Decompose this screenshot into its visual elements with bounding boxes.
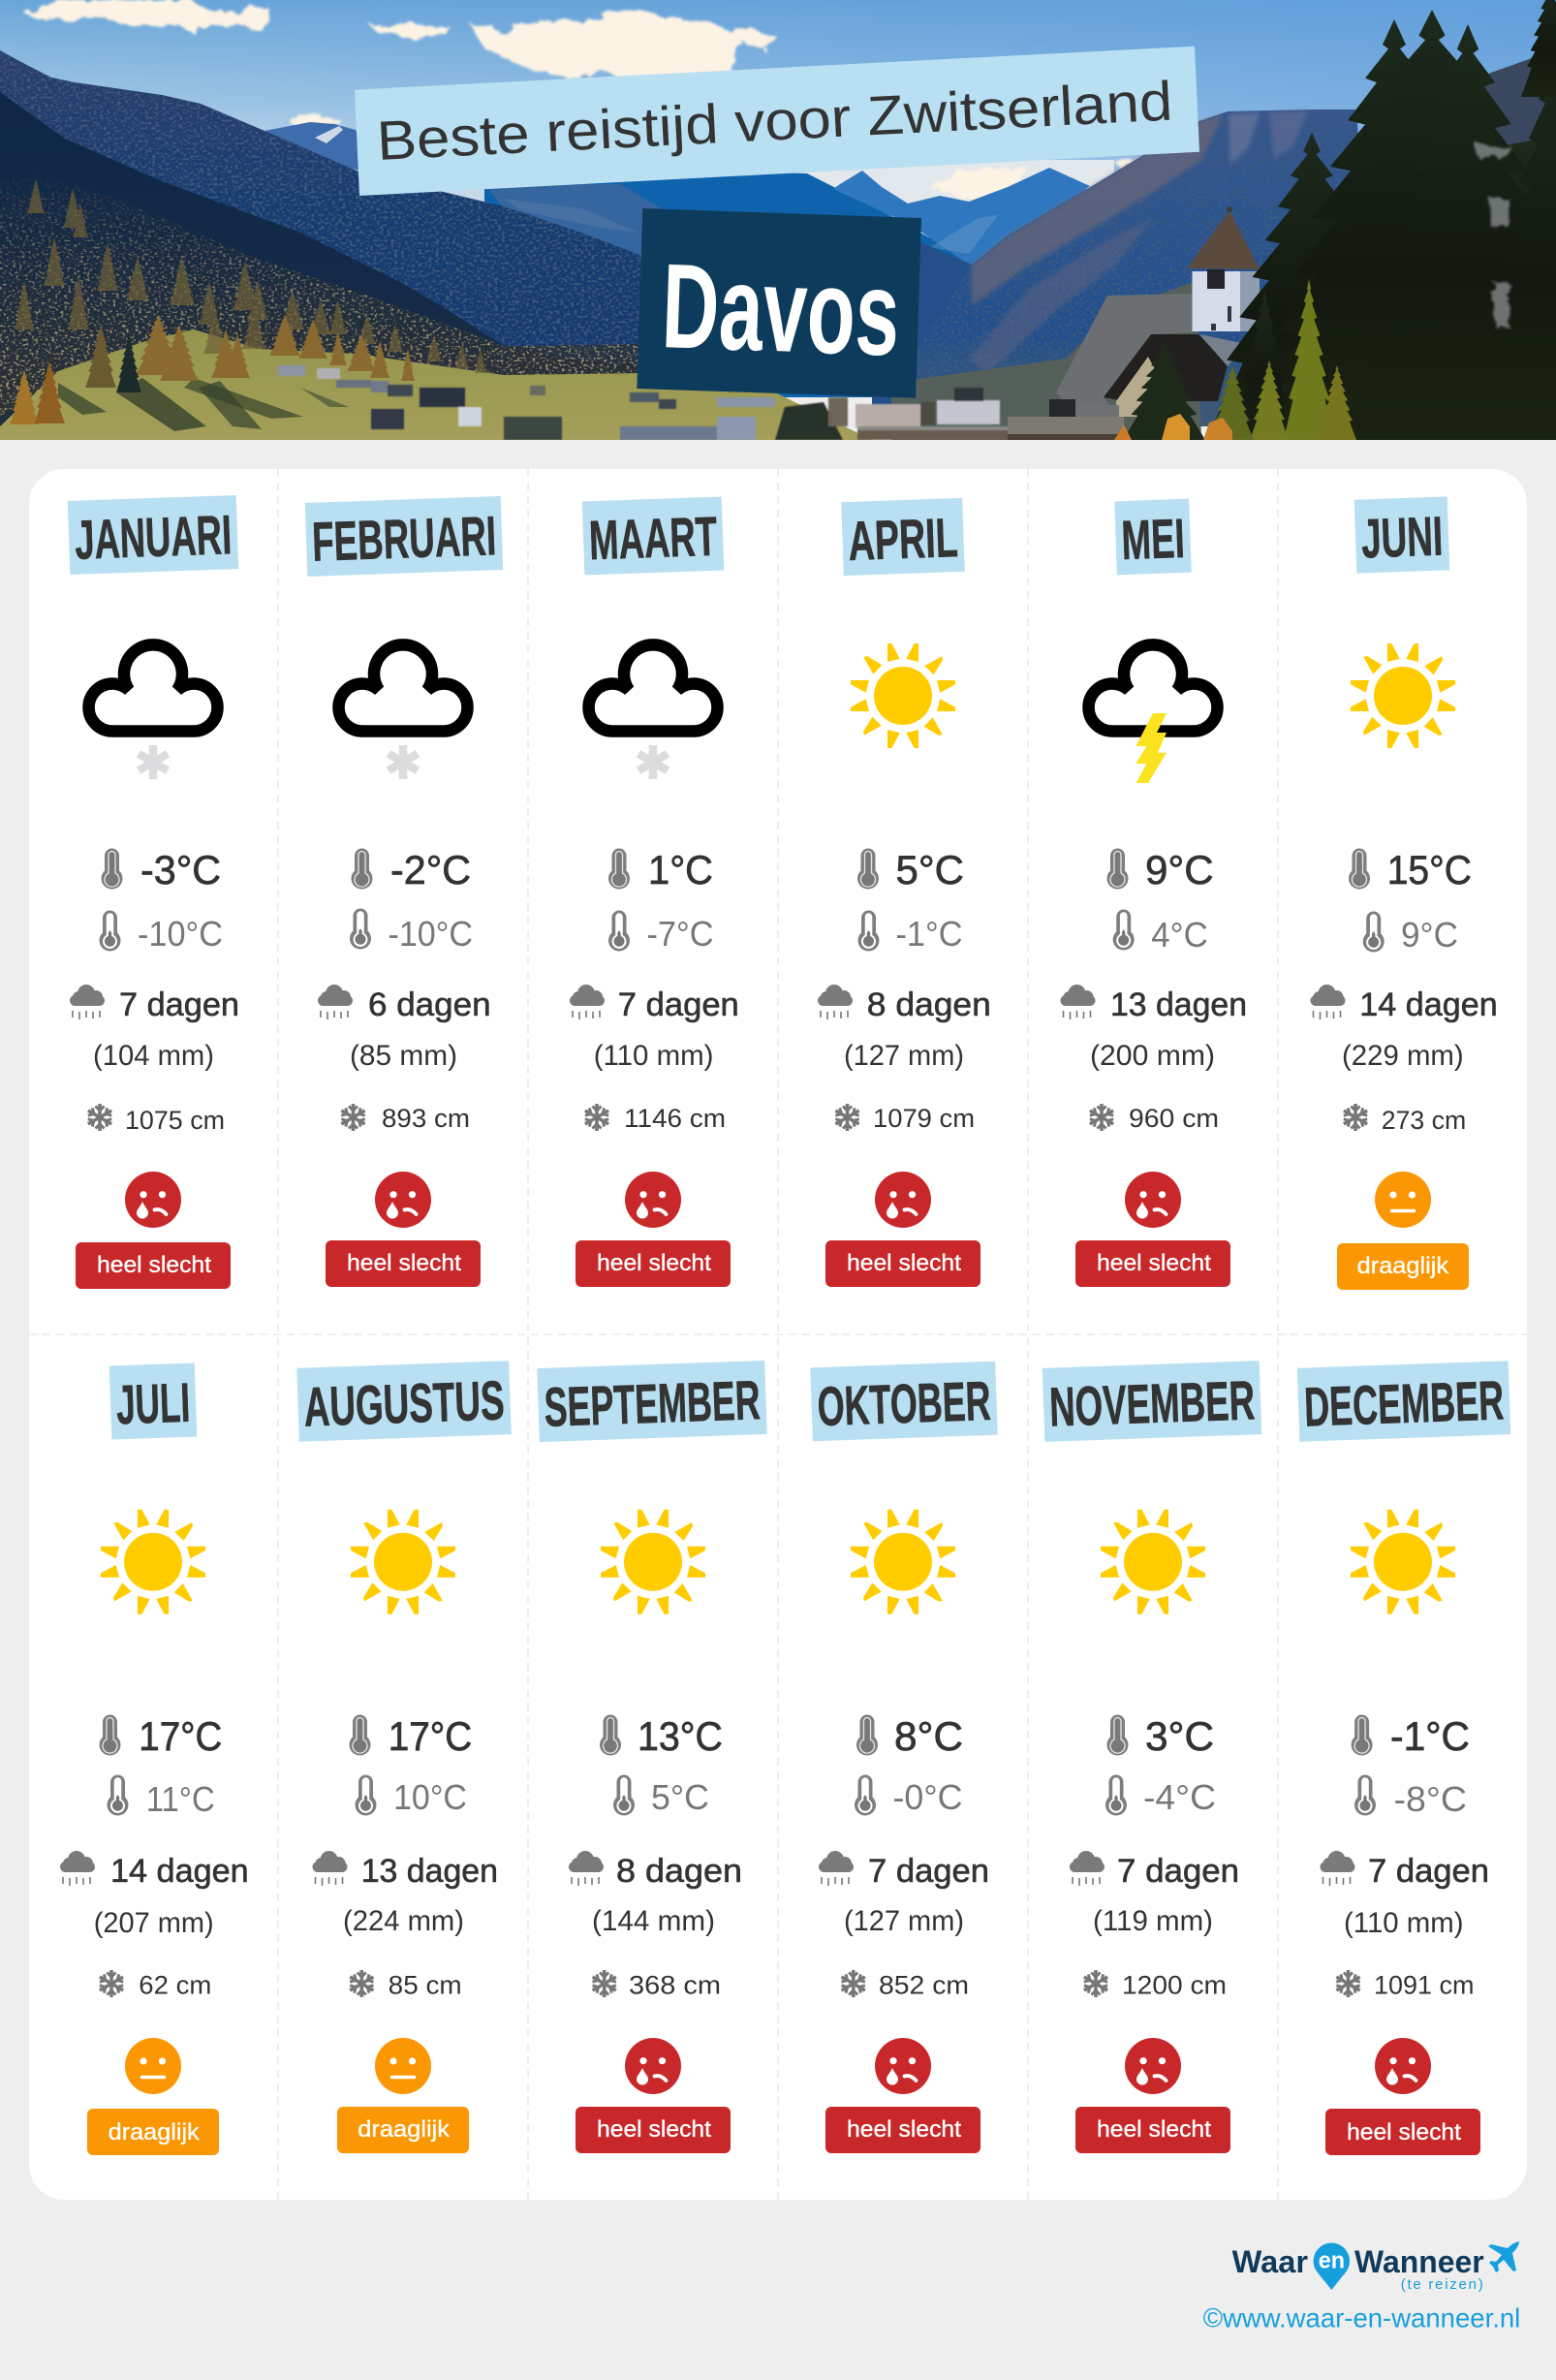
month: mei <box>1060 499 1247 1287</box>
max temperature: 15°C <box>1387 847 1472 892</box>
min temperature <box>350 909 473 954</box>
rain days <box>60 1851 249 1890</box>
rainfall: (207 mm) <box>94 1907 214 1939</box>
rating <box>326 1172 481 1287</box>
heading februari <box>305 496 503 577</box>
rain days <box>312 1851 498 1890</box>
icon: thunderstorm cloud <box>1089 644 1217 783</box>
far right slope behind trees <box>1484 58 1545 145</box>
snowfall: 1146 cm <box>624 1104 726 1133</box>
snowfall: 85 cm <box>389 1971 462 2000</box>
month: oktober <box>810 1362 998 2153</box>
central blue mountains <box>484 165 969 397</box>
rain days: 7 dagen <box>1368 1853 1489 1890</box>
max temperature <box>1349 847 1472 892</box>
rain days: 13 dagen <box>361 1853 498 1890</box>
snowfall: 62 cm <box>139 1971 211 2000</box>
heading mei: MEI <box>1121 508 1186 572</box>
larches inside the forest <box>15 179 486 373</box>
heading oktober <box>810 1362 998 1441</box>
heading april: APRIL <box>848 507 959 573</box>
rain days: 8 dagen <box>867 986 991 1023</box>
rain days: 7 dagen <box>868 1853 989 1890</box>
min temperature <box>858 911 963 954</box>
title banner: Beste reistijd voor Zwitserland <box>375 70 1174 172</box>
heading november: NOVEMBER <box>1048 1369 1256 1439</box>
rating <box>87 2038 219 2155</box>
heading april <box>841 498 965 576</box>
heading augustus <box>296 1361 512 1442</box>
larch forest texture <box>0 165 669 417</box>
heading juni: JUNI <box>1360 506 1444 570</box>
rating <box>76 1172 231 1289</box>
month: januari <box>68 495 239 1289</box>
rating: heel slecht <box>1097 2116 1211 2143</box>
snowfall <box>1088 1104 1219 1133</box>
max temperature <box>349 1713 472 1759</box>
building glimpses between trees <box>1477 145 1509 328</box>
min temperature <box>355 1775 467 1817</box>
rainfall: (224 mm) <box>343 1905 464 1937</box>
rain days: 7 dagen <box>618 986 739 1023</box>
rain days: 6 dagen <box>368 986 491 1023</box>
title banner <box>355 47 1199 196</box>
icon: snow cloud <box>589 644 717 779</box>
snowfall <box>339 1104 470 1133</box>
min temperature: -10°C <box>138 914 223 954</box>
rainfall: (229 mm) <box>1342 1040 1464 1072</box>
snowfall: 368 cm <box>629 1971 721 2000</box>
yellow larches and autumn bushes <box>1114 279 1356 440</box>
icon: snow cloud <box>89 644 217 779</box>
mid ridge right of centre <box>872 242 972 405</box>
min temperature <box>1113 909 1208 955</box>
min temperature: -10°C <box>388 914 473 954</box>
max temperature: 8°C <box>894 1713 963 1759</box>
max temperature: -3°C <box>140 847 221 892</box>
min temperature <box>608 911 713 954</box>
icon: snow cloud <box>339 644 467 779</box>
heading november <box>1043 1361 1261 1442</box>
month: november <box>1043 1361 1261 2153</box>
heading januari <box>68 495 238 575</box>
max temperature <box>856 1713 963 1759</box>
rating: heel slecht <box>1347 2119 1461 2145</box>
max temperature: 17°C <box>389 1713 472 1759</box>
snowfall: 1200 cm <box>1122 1971 1227 2000</box>
rain days <box>569 1851 742 1890</box>
rating <box>825 2038 980 2153</box>
golden larches on the slope <box>10 315 415 424</box>
dark spruce trees <box>1205 0 1556 440</box>
max temperature: -1°C <box>1390 1713 1470 1759</box>
rating: draaglijk <box>109 2119 201 2145</box>
min temperature: -8°C <box>1393 1779 1467 1819</box>
rainfall: (110 mm) <box>1344 1907 1463 1939</box>
rating: draaglijk <box>358 2116 451 2143</box>
min temperature: 11°C <box>146 1779 215 1819</box>
rain days <box>819 1851 989 1890</box>
rain days <box>1060 985 1247 1023</box>
min temperature <box>99 911 223 954</box>
rating: heel slecht <box>1097 1250 1211 1276</box>
max temperature <box>608 847 713 892</box>
location badge: Davos: Davos <box>660 239 902 382</box>
heading januari: JANUARI <box>74 504 233 572</box>
month: februari <box>305 496 503 1287</box>
distant left peak <box>265 122 358 171</box>
max temperature <box>1352 1713 1470 1759</box>
month: augustus <box>296 1361 512 2153</box>
heading augustus: AUGUSTUS <box>303 1369 506 1439</box>
icon: sun <box>851 1510 955 1614</box>
min temperature <box>1354 1775 1467 1819</box>
min temperature: 10°C <box>393 1777 467 1817</box>
copyright url: ©www.waar-en-wanneer.nl <box>1203 2303 1520 2333</box>
rain days <box>1320 1851 1489 1890</box>
snowfall: 1091 cm <box>1374 1971 1475 2000</box>
heading september: SEPTEMBER <box>544 1369 762 1439</box>
rating: heel slecht <box>597 1250 711 1276</box>
month: juli <box>60 1362 249 2155</box>
rain days <box>1070 1851 1239 1890</box>
meadow <box>0 329 872 440</box>
rating <box>576 2038 731 2153</box>
snowfall: 273 cm <box>1382 1106 1466 1135</box>
max temperature: 3°C <box>1145 1713 1214 1759</box>
rainfall: (110 mm) <box>594 1040 713 1072</box>
icon: sun <box>1351 1510 1455 1614</box>
icon: sun <box>351 1510 455 1614</box>
panel: monthly climate card <box>29 469 1527 2200</box>
snowfall: 893 cm <box>382 1104 470 1133</box>
rain days: 14 dagen <box>1359 986 1498 1023</box>
logo: Waar en Wanneer: Wanneer <box>1354 2244 1484 2279</box>
left back ridge <box>0 50 641 364</box>
rainfall: (104 mm) <box>93 1040 214 1072</box>
far jagged peaks <box>833 168 1090 266</box>
rainfall: (127 mm) <box>844 1905 964 1937</box>
max temperature: 17°C <box>139 1713 222 1759</box>
snowfall: 1079 cm <box>873 1104 975 1133</box>
snowfall <box>1342 1104 1466 1135</box>
month: december <box>1297 1361 1510 2155</box>
rating <box>1075 2038 1230 2153</box>
rating <box>1075 1172 1230 1287</box>
snowfall: 960 cm <box>1129 1104 1219 1133</box>
min temperature <box>107 1775 215 1819</box>
snowfall: 852 cm <box>879 1971 969 2000</box>
rating <box>825 1172 980 1287</box>
snowfall <box>86 1104 225 1135</box>
rating: heel slecht <box>97 1252 211 1278</box>
rainfall: (127 mm) <box>844 1040 964 1072</box>
heading september <box>537 1361 767 1442</box>
logo: Waar en Wanneer: (te reizen) <box>1401 2276 1483 2293</box>
max temperature: -2°C <box>390 847 471 892</box>
rating: heel slecht <box>847 1250 961 1276</box>
rain days: 7 dagen <box>1117 1853 1239 1890</box>
max temperature <box>101 847 221 892</box>
rain days <box>818 985 991 1023</box>
heading juli: JULI <box>115 1372 191 1436</box>
snowfall <box>839 1970 969 2000</box>
rain days: 7 dagen <box>119 986 239 1023</box>
rating: heel slecht <box>597 2116 711 2143</box>
left front ridge <box>0 92 669 436</box>
min temperature: -7°C <box>647 914 713 954</box>
month: maart <box>570 497 739 1287</box>
logo: Waar en Wanneer <box>1232 2241 1519 2293</box>
min temperature: -1°C <box>895 914 963 954</box>
icon: sun <box>1351 643 1455 748</box>
min temperature <box>1105 1775 1216 1817</box>
right mountain <box>918 110 1376 426</box>
icon: sun <box>1101 1510 1205 1614</box>
min temperature: 4°C <box>1151 915 1208 955</box>
rainfall: (200 mm) <box>1090 1040 1215 1072</box>
max temperature: 5°C <box>895 847 964 892</box>
icon: sun <box>101 1510 205 1614</box>
max temperature <box>857 847 964 892</box>
min temperature <box>613 1775 709 1817</box>
rain days <box>70 985 239 1023</box>
snowfall <box>1082 1970 1227 2000</box>
rain days <box>570 985 739 1023</box>
rating <box>337 2038 469 2153</box>
max temperature: 9°C <box>1145 847 1214 892</box>
rain days: 14 dagen <box>110 1853 249 1890</box>
rainfall: (119 mm) <box>1093 1905 1213 1937</box>
min temperature: 5°C <box>651 1777 709 1817</box>
icon: map pin: en <box>1319 2248 1345 2274</box>
church <box>1008 206 1260 440</box>
max temperature <box>351 847 471 892</box>
max temperature <box>1106 1713 1214 1759</box>
month: september <box>537 1361 767 2153</box>
max temperature <box>1106 847 1214 892</box>
rating: heel slecht <box>347 1250 461 1276</box>
heading mei <box>1114 499 1192 575</box>
month: juni <box>1310 496 1498 1290</box>
snowfall <box>348 1970 462 2000</box>
icon: sun <box>851 643 955 748</box>
max temperature: 1°C <box>648 847 713 892</box>
max temperature: 13°C <box>638 1713 723 1759</box>
rainfall: (85 mm) <box>350 1040 457 1072</box>
min temperature <box>1363 911 1458 955</box>
rating <box>1337 1172 1469 1290</box>
rating: draaglijk <box>1357 1253 1449 1279</box>
min temperature <box>855 1775 963 1817</box>
rating: heel slecht <box>847 2116 961 2143</box>
min temperature: 9°C <box>1401 915 1458 955</box>
rain days: 13 dagen <box>1110 986 1247 1023</box>
snowfall <box>590 1970 721 2000</box>
heading februari: FEBRUARI <box>311 505 497 574</box>
heading juni <box>1354 496 1449 574</box>
rating <box>1325 2038 1480 2155</box>
logo: Waar en Wanneer: Waar <box>1232 2244 1308 2279</box>
rain days: 8 dagen <box>616 1853 742 1890</box>
rain days <box>318 985 491 1023</box>
hero: alpine valley photo <box>0 0 1556 440</box>
location badge: Davos <box>637 208 921 398</box>
icon: sun <box>601 1510 705 1614</box>
heading juli <box>109 1362 197 1440</box>
max temperature <box>600 1713 723 1759</box>
sky <box>0 0 1556 218</box>
rainfall: (144 mm) <box>592 1905 715 1937</box>
min temperature: -4°C <box>1143 1777 1216 1817</box>
village <box>278 365 1012 440</box>
icon: airplane <box>1488 2241 1519 2272</box>
heading maart <box>582 497 724 575</box>
rating <box>576 1172 731 1287</box>
snowfall <box>583 1104 726 1133</box>
clouds <box>22 0 1143 200</box>
snowfall: 1075 cm <box>125 1106 225 1135</box>
icon: map pin <box>1314 2243 1350 2290</box>
month: april <box>818 498 991 1287</box>
min temperature: -0°C <box>893 1777 963 1817</box>
heading maart: MAART <box>588 506 718 572</box>
rain days <box>1310 985 1498 1023</box>
max temperature <box>99 1713 222 1759</box>
valley floor <box>891 281 1201 440</box>
snowfall <box>98 1970 211 2000</box>
heading oktober: OKTOBER <box>817 1370 992 1438</box>
